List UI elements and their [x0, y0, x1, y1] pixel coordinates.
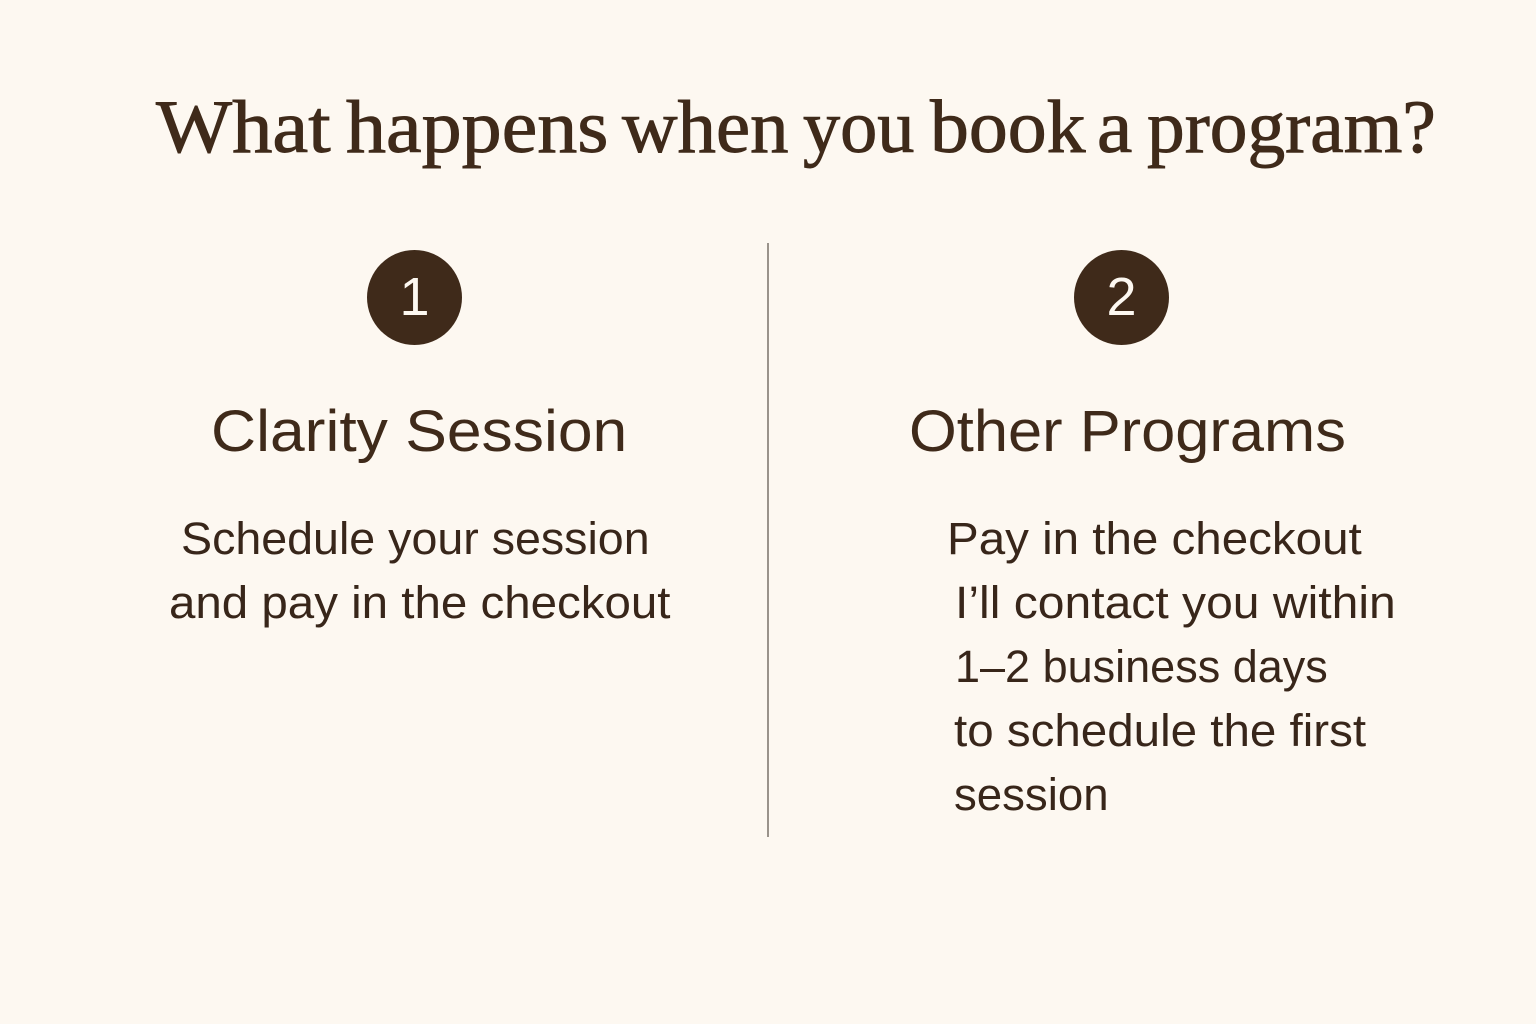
title: [156, 86, 1436, 169]
text block: other programs steps: [947, 513, 1396, 820]
text block: clarity session steps: Schedule your session: [181, 513, 650, 564]
heading: other programs: Other Programs: [909, 399, 1346, 464]
title: you: [803, 86, 914, 169]
divider between columns: [767, 243, 769, 837]
title: book: [930, 86, 1086, 169]
text block: clarity session steps: [169, 513, 670, 628]
title: happens: [346, 86, 608, 169]
text block: other programs steps: session: [954, 769, 1109, 820]
heading: clarity session: Clarity Session: [211, 399, 627, 464]
title: What: [156, 86, 331, 169]
text block: other programs steps: Pay in the checkout: [947, 513, 1362, 564]
icon: number 2 badge: [1074, 250, 1169, 345]
title: program?: [1147, 86, 1436, 169]
text block: other programs steps: I’ll contact you within: [955, 577, 1396, 628]
icon: number 1 badge: [367, 250, 462, 345]
icon: number 1 badge: 1: [399, 267, 430, 327]
panel: clarity session: [169, 250, 670, 628]
text block: clarity session steps: and pay in the checkout: [169, 577, 670, 628]
title: a: [1097, 86, 1132, 169]
text block: other programs steps: to schedule the first: [954, 705, 1366, 756]
title: when: [622, 86, 789, 169]
icon: number 2 badge: 2: [1106, 267, 1137, 327]
text block: other programs steps: 1–2 business days: [955, 641, 1328, 692]
panel: other programs: [909, 250, 1396, 820]
